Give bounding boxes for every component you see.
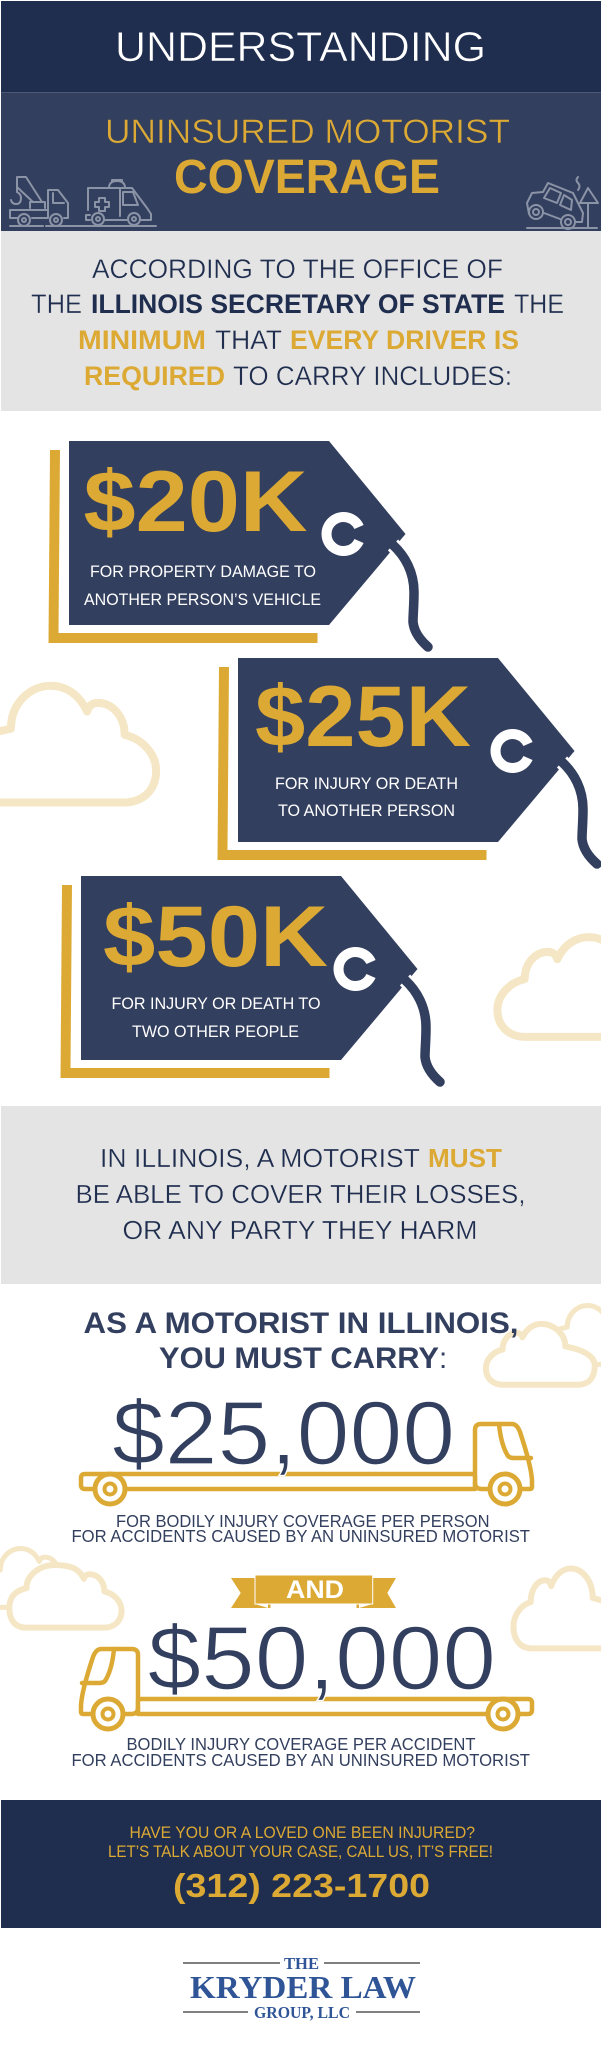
decoration: cloud right of tags xyxy=(497,937,601,1037)
figure: $25,000: $25,000 xyxy=(112,1384,455,1484)
caption: per accident: BODILY INJURY COVERAGE PER ACCIDENT xyxy=(126,1734,476,1754)
tag: $50K injury to two people xyxy=(60,876,440,1082)
description xyxy=(84,563,321,609)
text: must cover losses: MUST xyxy=(428,1143,502,1173)
description: ANOTHER PERSON’S VEHICLE xyxy=(84,591,321,609)
text: illinois secretary of state line: THE xyxy=(31,289,82,319)
heading: coverage: COVERAGE xyxy=(174,151,440,204)
description: FOR PROPERTY DAMAGE TO xyxy=(90,563,316,581)
panel: minimum requirement intro xyxy=(1,231,601,411)
description: TO ANOTHER PERSON xyxy=(278,802,455,820)
ribbon: and xyxy=(231,1575,396,1608)
heading: understanding: UNDERSTANDING xyxy=(115,23,486,70)
illustration: flatbed truck one xyxy=(81,1424,532,1504)
description: TWO OTHER PEOPLE xyxy=(132,1023,299,1041)
logo: the kryder law group: KRYDER LAW xyxy=(190,1969,416,2005)
caption: per person: FOR ACCIDENTS CAUSED BY AN UNINSURED MOTORIST xyxy=(72,1526,530,1546)
heading: uninsured motorist: UNINSURED MOTORIST xyxy=(105,113,510,151)
panel: title banner xyxy=(1,1,601,92)
text: must cover losses: OR ANY PARTY THEY HARM xyxy=(122,1215,478,1245)
decoration: clouds top right of requirement xyxy=(486,1305,601,1385)
tag: $25K injury to another person xyxy=(218,658,597,864)
text: must cover losses: IN ILLINOIS, A MOTORIST xyxy=(100,1143,420,1173)
panel: motorist must cover losses xyxy=(1,1106,601,1284)
description: FOR INJURY OR DEATH TO xyxy=(112,995,321,1013)
caption: per accident: FOR ACCIDENTS CAUSED BY AN UNINSURED MOTORIST xyxy=(72,1750,530,1770)
amount: $25K xyxy=(255,669,471,765)
tag: $20K property damage xyxy=(48,441,428,647)
panel: coverage title xyxy=(1,92,601,231)
description xyxy=(275,775,458,820)
label: and: AND xyxy=(286,1576,344,1604)
illustration: flatbed truck two xyxy=(81,1649,532,1729)
text: according to the office: ACCORDING TO THE OFFICE OF xyxy=(92,254,503,284)
caption: per accident xyxy=(72,1734,530,1770)
icon: tow truck xyxy=(10,177,156,226)
logo: the kryder law group: GROUP, LLC xyxy=(254,2003,350,2022)
decoration: cloud right of and xyxy=(513,1569,601,1648)
amount: $20K xyxy=(84,454,308,550)
text: illinois secretary of state line: ILLINOIS SECRETARY OF STATE xyxy=(91,289,505,319)
decoration: clouds left of and xyxy=(0,1548,122,1628)
amount: $50K xyxy=(103,889,328,985)
text: call prompt: LET’S TALK ABOUT YOUR CASE, CALL US, IT’S FREE! xyxy=(108,1842,493,1861)
icon: ambulance xyxy=(86,180,151,225)
text: minimum every driver line: EVERY DRIVER IS xyxy=(290,325,519,355)
caption: per person: FOR BODILY INJURY COVERAGE PER PERSON xyxy=(116,1511,490,1531)
description xyxy=(112,995,321,1041)
logo: the kryder law group: THE xyxy=(284,1954,319,1973)
panel: call to action xyxy=(1,1800,601,1928)
description: FOR INJURY OR DEATH xyxy=(275,775,458,793)
heading: you must carry: : xyxy=(439,1342,447,1375)
decoration: cloud left of tags xyxy=(0,686,156,803)
text: required to carry line: TO CARRY INCLUDES: xyxy=(233,361,512,391)
text: call prompt xyxy=(108,1823,493,1861)
logo: the kryder law group xyxy=(183,1954,420,2022)
heading: you must carry: YOU MUST CARRY xyxy=(159,1342,439,1375)
text: must cover losses: BE ABLE TO COVER THEIR LOSSES, xyxy=(76,1179,526,1209)
icon: crashed car and sign xyxy=(527,177,598,229)
text: minimum every driver line: MINIMUM xyxy=(78,325,206,355)
text: phone number: (312) 223-1700 xyxy=(173,1867,430,1904)
text: illinois secretary of state line: THE xyxy=(514,289,564,319)
text: call prompt: HAVE YOU OR A LOVED ONE BEEN INJURED? xyxy=(130,1823,475,1842)
text: minimum every driver line xyxy=(78,325,519,355)
text: minimum every driver line: THAT xyxy=(215,325,282,355)
text: required to carry line xyxy=(84,361,512,391)
text: required to carry line: REQUIRED xyxy=(84,361,225,391)
heading: you must carry xyxy=(84,1307,518,1375)
caption: per person xyxy=(72,1511,530,1546)
figure: $50,000: $50,000 xyxy=(148,1609,496,1709)
heading: you must carry: AS A MOTORIST IN ILLINOIS, xyxy=(84,1307,518,1340)
text: must cover losses xyxy=(76,1143,526,1245)
